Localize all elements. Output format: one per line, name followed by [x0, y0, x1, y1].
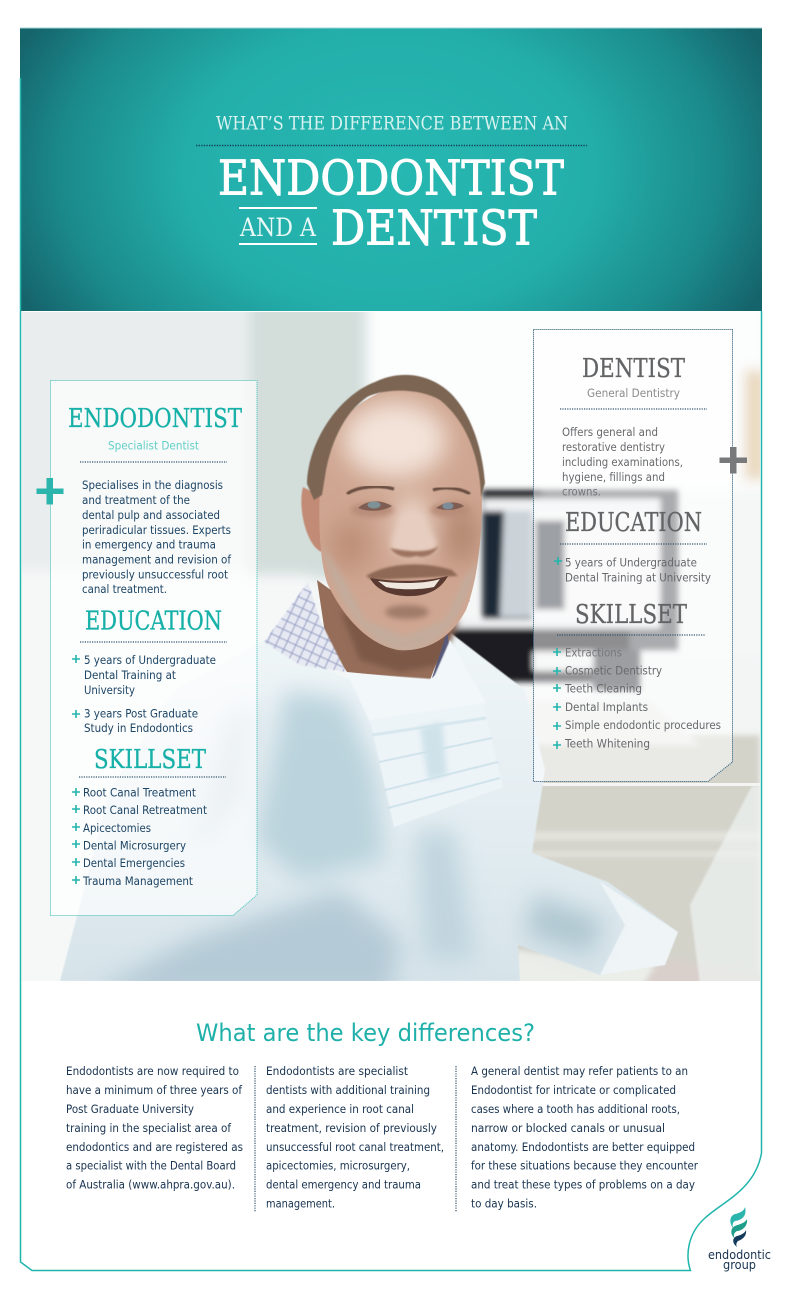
- text column 2: unsuccessful root canal treatment,: [266, 1141, 444, 1154]
- education list: Study in Endodontics: [84, 722, 193, 735]
- man: gown and body: [60, 630, 678, 981]
- icon: large grey plus: [720, 447, 747, 474]
- description text: Offers general and: [562, 426, 658, 439]
- photo background: computer monitor showing x-ray: [450, 490, 678, 690]
- man: face: [319, 390, 482, 650]
- text column 2: treatment, revision of previously: [266, 1122, 437, 1135]
- text column 1: training in the specialist area of: [66, 1122, 232, 1135]
- description text: [562, 426, 683, 498]
- education list: Dental Training at: [84, 669, 177, 682]
- header banner: [20, 28, 762, 311]
- logo: endodontic group: [708, 1207, 771, 1272]
- heading: education: EDUCATION: [565, 508, 702, 538]
- text column 3: A general dentist may refer patients to an: [471, 1065, 688, 1078]
- text column 1: a specialist with the Dental Board: [66, 1160, 236, 1172]
- logo: endodontic group: group: [723, 1258, 756, 1272]
- skillset list: [553, 646, 721, 750]
- description text: dental pulp and associated: [82, 509, 220, 522]
- text column 3: anatomy. Endodontists are better equipped: [471, 1141, 695, 1154]
- skillset list: Dental Implants: [565, 701, 648, 714]
- description text: in emergency and trauma: [82, 538, 216, 552]
- education list: 5 years of Undergraduate: [84, 654, 216, 667]
- subheading: general dentistry: General Dentistry: [587, 387, 680, 400]
- heading: skillset: SKILLSET: [94, 745, 207, 775]
- heading: skillset: SKILLSET: [575, 600, 688, 630]
- skillset list: Dental Emergencies: [83, 857, 185, 870]
- skillset list: Teeth Whitening: [564, 738, 650, 750]
- text column 1: [66, 1065, 243, 1192]
- heading: education: EDUCATION: [85, 606, 222, 636]
- panel: endodontist: [36, 380, 257, 916]
- description text: management and revision of: [82, 554, 232, 566]
- skillset list: Trauma Management: [82, 875, 194, 888]
- man: eyebrows and eyes: [347, 487, 470, 511]
- logo wordmark: endodontic: [708, 1248, 771, 1262]
- description text: including examinations,: [562, 456, 683, 469]
- icon: large plus: [36, 478, 64, 504]
- text column 2: dentists with additional training: [266, 1084, 430, 1097]
- education list: Dental Training at University: [565, 572, 711, 584]
- text column 1: endodontics and are registered as: [66, 1141, 243, 1154]
- heading: endodontist: ENDODONTIST: [68, 404, 243, 434]
- man: glove highlight: [600, 882, 678, 975]
- description text: restorative dentistry: [562, 441, 665, 454]
- text column 2: management.: [266, 1198, 335, 1210]
- man: nose: [389, 525, 439, 558]
- man: mask hanging from neck: [347, 640, 503, 827]
- skillset list: Extractions: [565, 646, 622, 660]
- column divider 1: [254, 1066, 256, 1212]
- skillset list: Teeth Cleaning: [564, 682, 642, 696]
- text column 3: cases where a tooth has additional roots,: [471, 1103, 680, 1116]
- man: neck: [317, 580, 470, 680]
- text column 3: and treat these types of problems on a day: [471, 1178, 695, 1192]
- skillset list: Root Canal Retreatment: [83, 804, 208, 817]
- panel: dentist: [534, 330, 747, 782]
- text column 3: [471, 1065, 698, 1210]
- panel background: [534, 330, 732, 782]
- text column 1: of Australia (www.ahpra.gov.au).: [66, 1178, 235, 1192]
- description text: hygiene, fillings and: [562, 471, 665, 484]
- highlight strip and translucent chevron: [540, 783, 760, 786]
- education list: 5 years of Undergraduate: [565, 556, 697, 570]
- heading: what's the difference: WHAT’S THE DIFFERENCE BETWEEN AN: [216, 112, 568, 134]
- text column 3: for these situations because they encounter: [471, 1160, 698, 1172]
- photo background: grey bench: [510, 700, 765, 990]
- man: ear: [300, 486, 322, 552]
- panel background: [50, 380, 257, 916]
- text column 3: to day basis.: [471, 1198, 537, 1210]
- heading: dentist: DENTIST: [582, 354, 686, 384]
- skillset list: Simple endodontic procedures: [565, 719, 721, 732]
- education list: [72, 654, 216, 735]
- description text: [82, 479, 232, 596]
- text column 1: have a minimum of three years of: [66, 1084, 243, 1097]
- heading: and a: [239, 207, 317, 245]
- text column 2: [266, 1065, 444, 1210]
- text column 1: Endodontists are now required to: [66, 1065, 239, 1078]
- text column 3: narrow or blocked canals or unusual: [471, 1122, 665, 1135]
- text column 2: apicectomies, microsurgery,: [266, 1160, 410, 1172]
- photo: smiling endodontist in a surgery: [10, 300, 770, 995]
- header dotted rule: [196, 144, 587, 146]
- heading: endodontist: ENDODONTIST: [218, 150, 564, 206]
- education list: 3 years Post Graduate: [84, 708, 198, 720]
- description text: and treatment of the: [82, 494, 190, 507]
- text column 2: Endodontists are specialist: [266, 1065, 409, 1078]
- description text: crowns.: [562, 486, 601, 498]
- skillset list: Dental Microsurgery: [83, 840, 186, 852]
- man: hair: [307, 375, 485, 500]
- text column 3: Endodontist for intricate or complicated: [471, 1084, 676, 1097]
- description text: previously unsuccessful root: [82, 568, 229, 582]
- photo background: blurred wall and window: [22, 312, 760, 582]
- heading: and a: AND A: [239, 213, 317, 242]
- skillset list: [72, 786, 208, 888]
- education list: [554, 556, 711, 584]
- logo mark: [730, 1207, 747, 1247]
- description text: canal treatment.: [82, 583, 167, 596]
- subheading: specialist dentist: Specialist Dentist: [108, 440, 200, 452]
- text column 1: Post Graduate University: [66, 1103, 194, 1116]
- man: moustache and smile: [366, 564, 458, 596]
- heading: dentist: DENTIST: [331, 200, 537, 256]
- education list: University: [84, 684, 135, 697]
- description text: Specialises in the diagnosis: [82, 479, 223, 492]
- man: plaid collar: [264, 582, 346, 672]
- description text: periradicular tissues. Experts: [82, 524, 231, 537]
- heading: key differences: What are the key differences?: [196, 1019, 535, 1047]
- skillset list: Cosmetic Dentistry: [565, 664, 662, 678]
- skillset list: Apicectomies: [83, 822, 151, 835]
- text column 2: and experience in root canal: [266, 1103, 414, 1116]
- text column 2: dental emergency and trauma: [266, 1178, 421, 1192]
- skillset list: Root Canal Treatment: [83, 786, 197, 800]
- column divider 2: [455, 1066, 457, 1212]
- man: gown shading folds: [90, 690, 605, 995]
